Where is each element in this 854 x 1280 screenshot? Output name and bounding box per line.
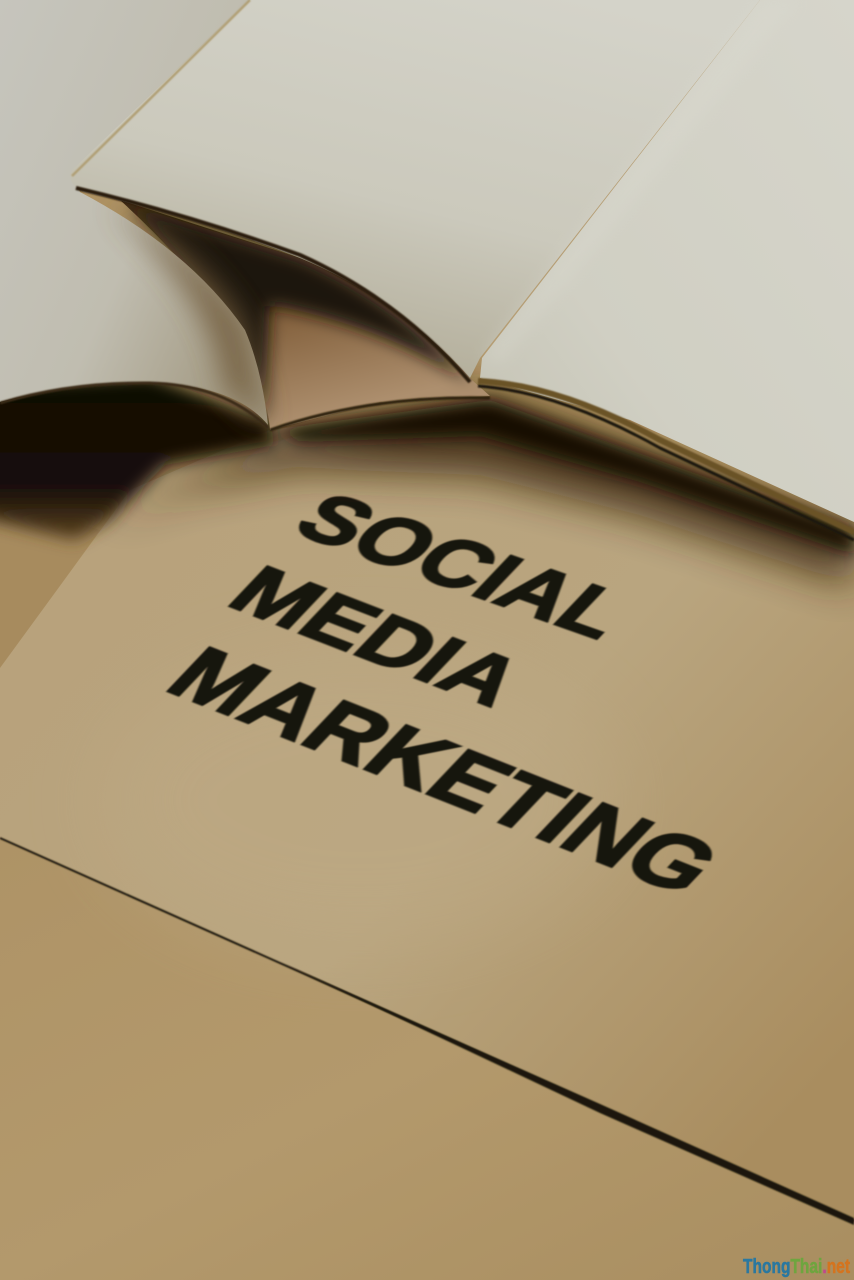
dark shadow on left	[0, 375, 275, 540]
left page bottom edge	[0, 383, 268, 428]
watermark: ThongThai.net: ThongThai.net	[743, 1256, 850, 1278]
notebook middle page	[70, 0, 760, 378]
middle page top edge	[72, 0, 250, 176]
left page shadow near fold	[110, 205, 266, 425]
fold shadow segment	[280, 962, 854, 1225]
notebook right page	[480, 0, 854, 522]
dark crease in notebook	[130, 205, 470, 425]
fold line between kraft sheets	[0, 838, 854, 1221]
shadow under the notebook on kraft	[100, 395, 854, 585]
left kraft strip	[0, 500, 100, 670]
lower kraft sheet	[0, 838, 854, 1280]
gutter highlight on right page	[482, 0, 800, 364]
notebook left page	[0, 0, 268, 425]
main kraft sheet with title	[0, 400, 854, 1218]
title word: MARKETING: MARKETING	[149, 631, 740, 909]
notebook inner fold	[120, 200, 490, 430]
inner page bottom edge	[270, 398, 490, 430]
title word: SOCIAL: SOCIAL	[278, 479, 648, 653]
title word: MEDIA: MEDIA	[212, 552, 542, 721]
right page bottom edge	[478, 381, 854, 532]
middle page bottom edge	[76, 188, 470, 382]
